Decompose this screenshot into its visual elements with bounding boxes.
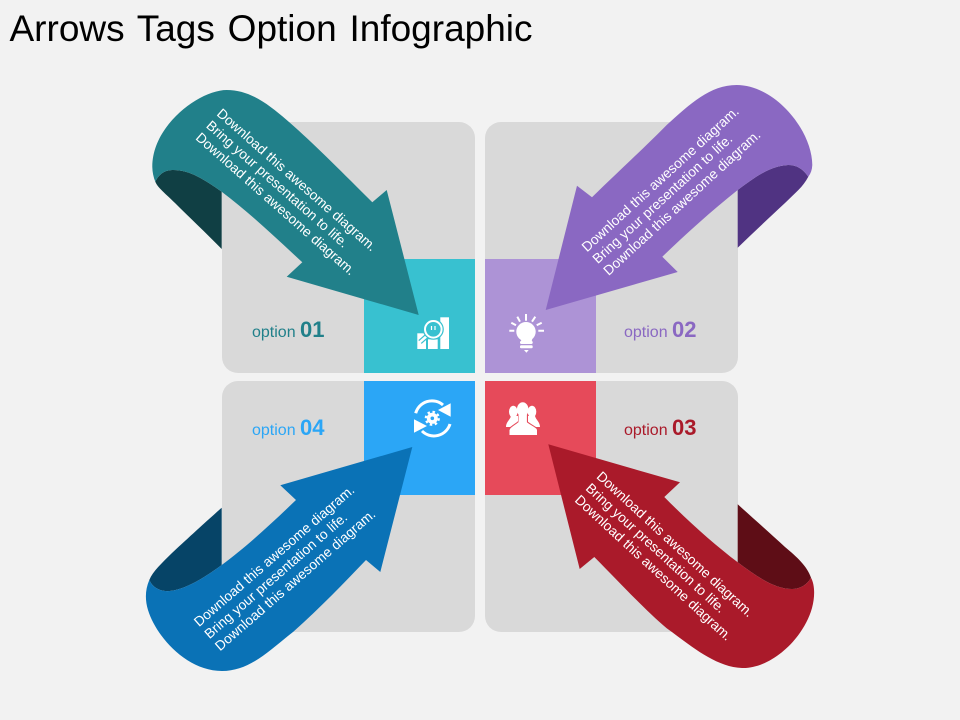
colour square 02 <box>485 259 596 373</box>
arrow text 02: Bring your presentation to life. <box>590 131 735 267</box>
ribbon fold 03 <box>738 504 811 589</box>
panel: option 03 <box>485 381 814 668</box>
arrow 03 <box>548 444 814 668</box>
arrow 01 <box>152 90 419 315</box>
arrow text 01: Bring your presentation to life. <box>203 118 351 251</box>
arrow text 02: Download this awesome diagram. <box>601 127 763 278</box>
ribbon fold 02 <box>738 165 808 248</box>
arrow text 01: Download this awesome diagram. <box>214 106 379 254</box>
label 03: option 03 <box>624 415 697 440</box>
colour square 01 <box>364 259 475 373</box>
icon: gear with refresh arrows <box>414 401 451 436</box>
colour square 03 <box>485 381 596 495</box>
panel: option 01 <box>152 90 475 373</box>
arrow 02 <box>546 85 812 310</box>
panel: option 04 <box>146 381 475 671</box>
label 02: option 02 <box>624 317 697 342</box>
arrow text 04: Download this awesome diagram. <box>191 482 357 630</box>
arrow text 03: Download this awesome diagram. <box>572 492 735 644</box>
arrow 04 <box>146 447 412 671</box>
ribbon fold 04 <box>149 508 222 591</box>
label 04: option 04 <box>252 415 325 440</box>
arrow text 03: Download this awesome diagram. <box>594 469 756 620</box>
arrow text 02: Download this awesome diagram. <box>579 104 742 255</box>
label 01: option 01 <box>252 317 325 342</box>
panel background 02 <box>485 122 738 373</box>
arrow text 01: Download this awesome diagram. <box>193 130 358 278</box>
arrow text 04: Bring your presentation to life. <box>202 510 350 642</box>
icon: light bulb <box>509 314 544 353</box>
panel: option 02 <box>485 85 812 373</box>
panel background 04 <box>222 381 475 632</box>
panel background 03 <box>485 381 738 632</box>
title: Arrows Tags Option Infographic <box>10 8 533 49</box>
panel background 01 <box>222 122 475 373</box>
ribbon fold 01 <box>155 170 222 249</box>
icon: chart with magnifier <box>417 317 449 349</box>
arrow text 03: Bring your presentation to life. <box>583 480 728 616</box>
colour square 04 <box>364 381 475 495</box>
icon: people <box>506 402 540 435</box>
arrow text 04: Download this awesome diagram. <box>212 506 378 654</box>
